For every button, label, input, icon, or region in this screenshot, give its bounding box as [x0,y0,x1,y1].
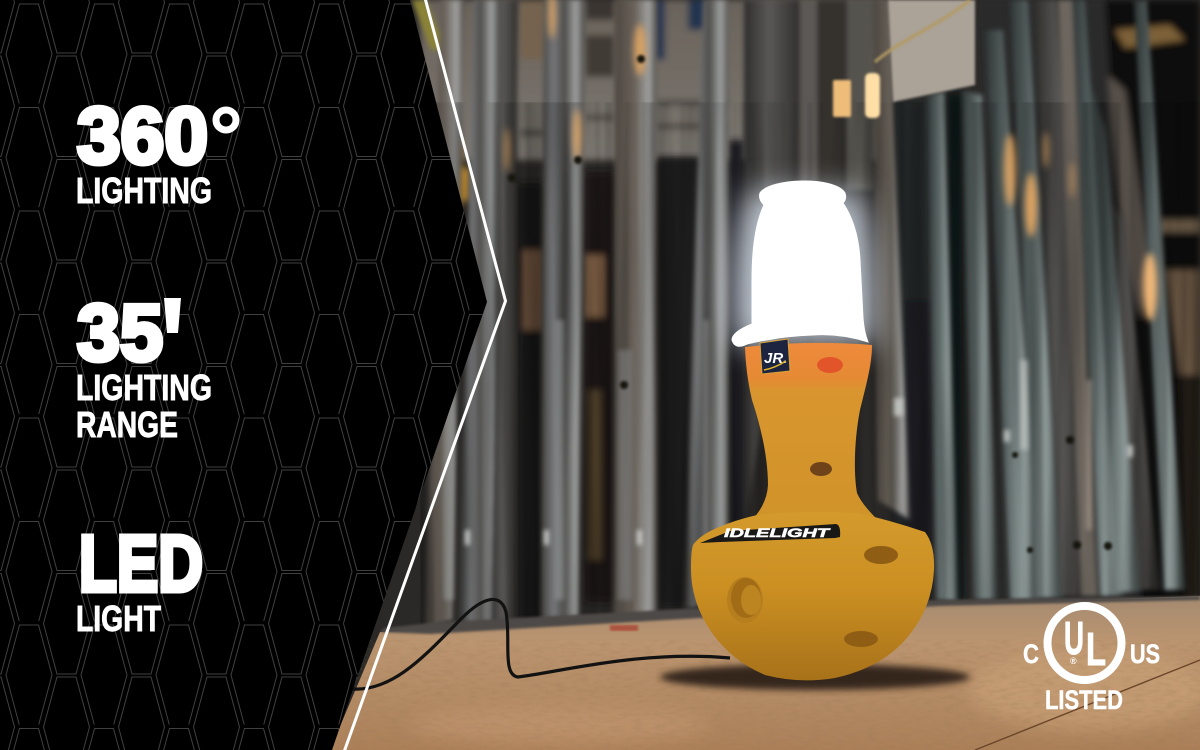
UL listed logo: L [1086,623,1106,675]
lamp shadow [660,664,970,690]
name plate [700,524,840,543]
UL listed logo: U [1064,612,1084,664]
stat: 35 foot lighting range: RANGE [76,404,178,445]
stat: LED light: LED [79,519,203,608]
floor [330,596,1200,750]
name plate: IDLELIGHT [724,526,832,540]
glowing globe [732,181,868,346]
UL listed logo: ® [1070,656,1077,666]
UL listed logo: C [1023,639,1039,669]
warm highlights on studs [504,0,1157,321]
lamp base [691,512,934,680]
right receding wall and ceiling [975,0,1200,600]
floor seam [975,660,1200,750]
UL listed logo: LISTED [1045,685,1123,715]
stat: 35 foot lighting range: LIGHTING [76,367,212,408]
stat: 35 foot lighting range [76,288,212,445]
stat: 360 degree lighting: LIGHTING [76,170,212,211]
UL listed logo [1023,606,1160,715]
overhead cable [875,0,970,62]
white chevron line [344,0,506,750]
stat: 35 foot lighting range: 35 [77,288,163,377]
stat: LED light [76,519,203,639]
bolt holes [508,55,1112,553]
studs [412,0,1185,630]
stud texture streaks [420,102,1200,625]
stat: LED light: LIGHT [76,598,161,639]
work light [691,181,934,680]
photo background: steel stud wall [330,0,1200,750]
left black chevron panel [0,0,487,750]
stat: 360 degree lighting [76,91,236,211]
dark bays between studs [432,92,964,623]
lamp glow [732,190,877,345]
drywall panel [888,0,975,102]
JR badge: JR. [764,350,787,367]
power cable [352,599,730,689]
JR badge [760,339,790,374]
stat: 360 degree lighting: 360 [77,91,208,180]
lamp neck [745,343,880,522]
bright metal glints [444,320,1133,600]
floor texture [345,640,1200,750]
UL listed logo: US [1130,639,1160,669]
base holes [727,577,763,623]
upper wall band [420,0,890,160]
